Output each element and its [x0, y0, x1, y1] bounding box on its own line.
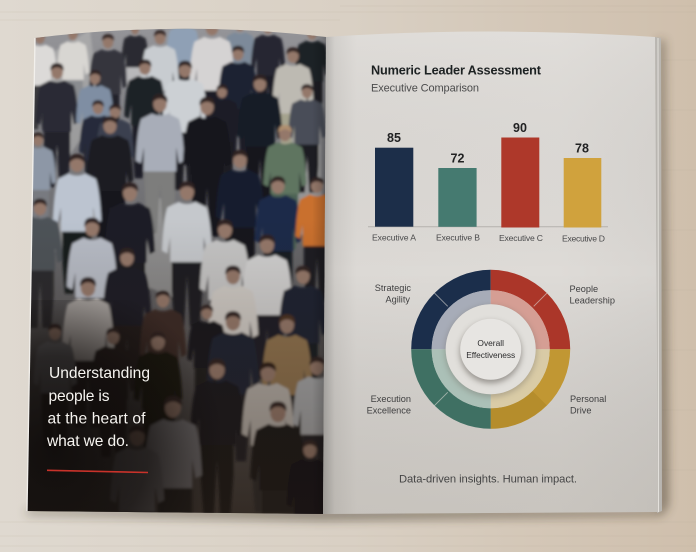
- bar: Executive B 72: Executive B: [436, 232, 480, 242]
- bar: Executive B 72: [436, 152, 480, 242]
- segment: people leadership: [491, 270, 570, 349]
- label: strategic agility: [375, 283, 411, 304]
- label: personal drive: Drive: [570, 406, 591, 416]
- heading: chart title: Numeric Leader Assessment: [371, 64, 542, 78]
- headline text: people is: [48, 388, 110, 405]
- bar: Executive C 90: Executive C: [499, 233, 543, 243]
- label: personal drive: [570, 394, 606, 416]
- left page white edge: [27, 38, 35, 511]
- label: people leadership: [570, 284, 615, 306]
- label: people leadership: People: [570, 284, 598, 294]
- segment: execution excellence: [411, 349, 491, 429]
- bar: Executive D 78: [562, 142, 605, 244]
- bar: Executive C 90: [499, 121, 543, 243]
- label: people leadership: Leadership: [570, 296, 615, 306]
- bar: Executive A 85: 85: [387, 131, 401, 145]
- segment: personal drive: [491, 349, 570, 429]
- panel: right page: [323, 32, 662, 514]
- headline text: Understanding: [49, 365, 150, 382]
- headline text: what we do.: [46, 433, 129, 450]
- bar: Executive B 72: 72: [451, 152, 464, 166]
- label: execution excellence: Execution: [371, 394, 411, 404]
- bar chart: [368, 121, 608, 244]
- heading: subtitle: Executive Comparison: [371, 82, 479, 94]
- inner ring: [445, 305, 537, 397]
- label: personal drive: Personal: [570, 394, 606, 404]
- center hub: Overall: [477, 338, 504, 348]
- center hub: [460, 319, 522, 383]
- bar: Executive A 85: Executive A: [372, 232, 416, 242]
- crowd of walking people: [30, 28, 326, 514]
- headline text: at the heart of: [48, 410, 146, 428]
- bar: Executive C 90: 90: [513, 121, 527, 135]
- headline text: [46, 365, 150, 450]
- red accent line: [47, 470, 148, 472]
- center hub: Effectiveness: [466, 350, 515, 360]
- panel: left page crowd photo: [28, 28, 326, 514]
- label: execution excellence: Excellence: [367, 406, 411, 416]
- label: execution excellence: [367, 394, 411, 416]
- donut chart: [411, 270, 570, 429]
- tagline: Data-driven insights. Human impact.: [399, 474, 577, 486]
- label: strategic agility: Strategic: [375, 283, 411, 293]
- label: strategic agility: Agility: [385, 294, 410, 304]
- bar: Executive D 78: Executive D: [562, 234, 605, 244]
- segment: strategic agility: [411, 270, 491, 349]
- bar: Executive A 85: [372, 131, 416, 242]
- bar: Executive D 78: 78: [575, 142, 589, 156]
